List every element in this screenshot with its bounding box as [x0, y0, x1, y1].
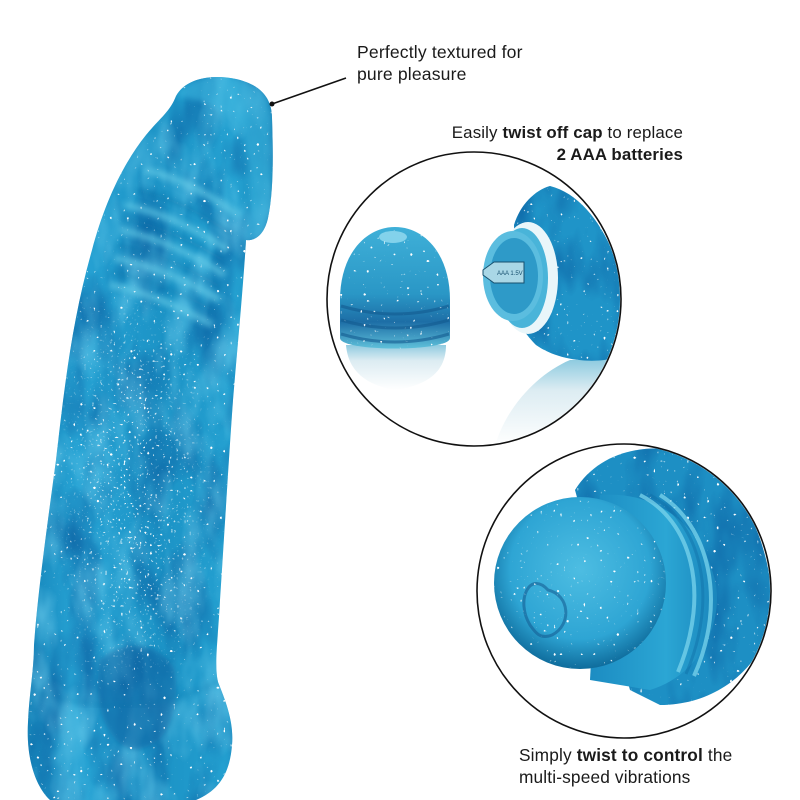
battery label: AAA 1.5V	[497, 271, 523, 277]
text: cap callout	[452, 123, 683, 164]
lower core	[98, 646, 176, 750]
tail reflection	[630, 722, 720, 745]
battery label	[483, 262, 524, 283]
leader line: texture callout	[270, 78, 346, 106]
product shoulder	[575, 448, 772, 705]
twist ball	[494, 497, 666, 669]
removed cap	[340, 227, 450, 348]
product body	[28, 77, 273, 800]
text: cap callout: 2 AAA batteries	[557, 145, 683, 164]
texture ridges	[110, 170, 238, 325]
text: texture callout: Perfectly textured for	[357, 42, 523, 62]
product reflection	[500, 360, 606, 432]
battery compartment body	[483, 186, 625, 361]
text: texture callout: pure pleasure	[357, 64, 467, 84]
text: twist callout: multi-speed vibrations	[519, 767, 690, 787]
twist ridges	[590, 495, 717, 690]
text: twist callout: Simply twist to control the	[519, 745, 732, 765]
circle: cap detail	[327, 152, 625, 446]
white ring	[509, 222, 558, 334]
head highlight	[176, 77, 273, 240]
text: texture callout	[357, 42, 523, 84]
circle: twist control detail	[477, 444, 772, 745]
cap reflection	[346, 345, 446, 384]
base bulge line	[67, 680, 218, 703]
text: cap callout: Easily twist off cap to replace	[452, 123, 683, 142]
text: twist callout	[519, 745, 732, 787]
dense glitter core	[52, 297, 220, 684]
sparkle	[28, 77, 273, 800]
